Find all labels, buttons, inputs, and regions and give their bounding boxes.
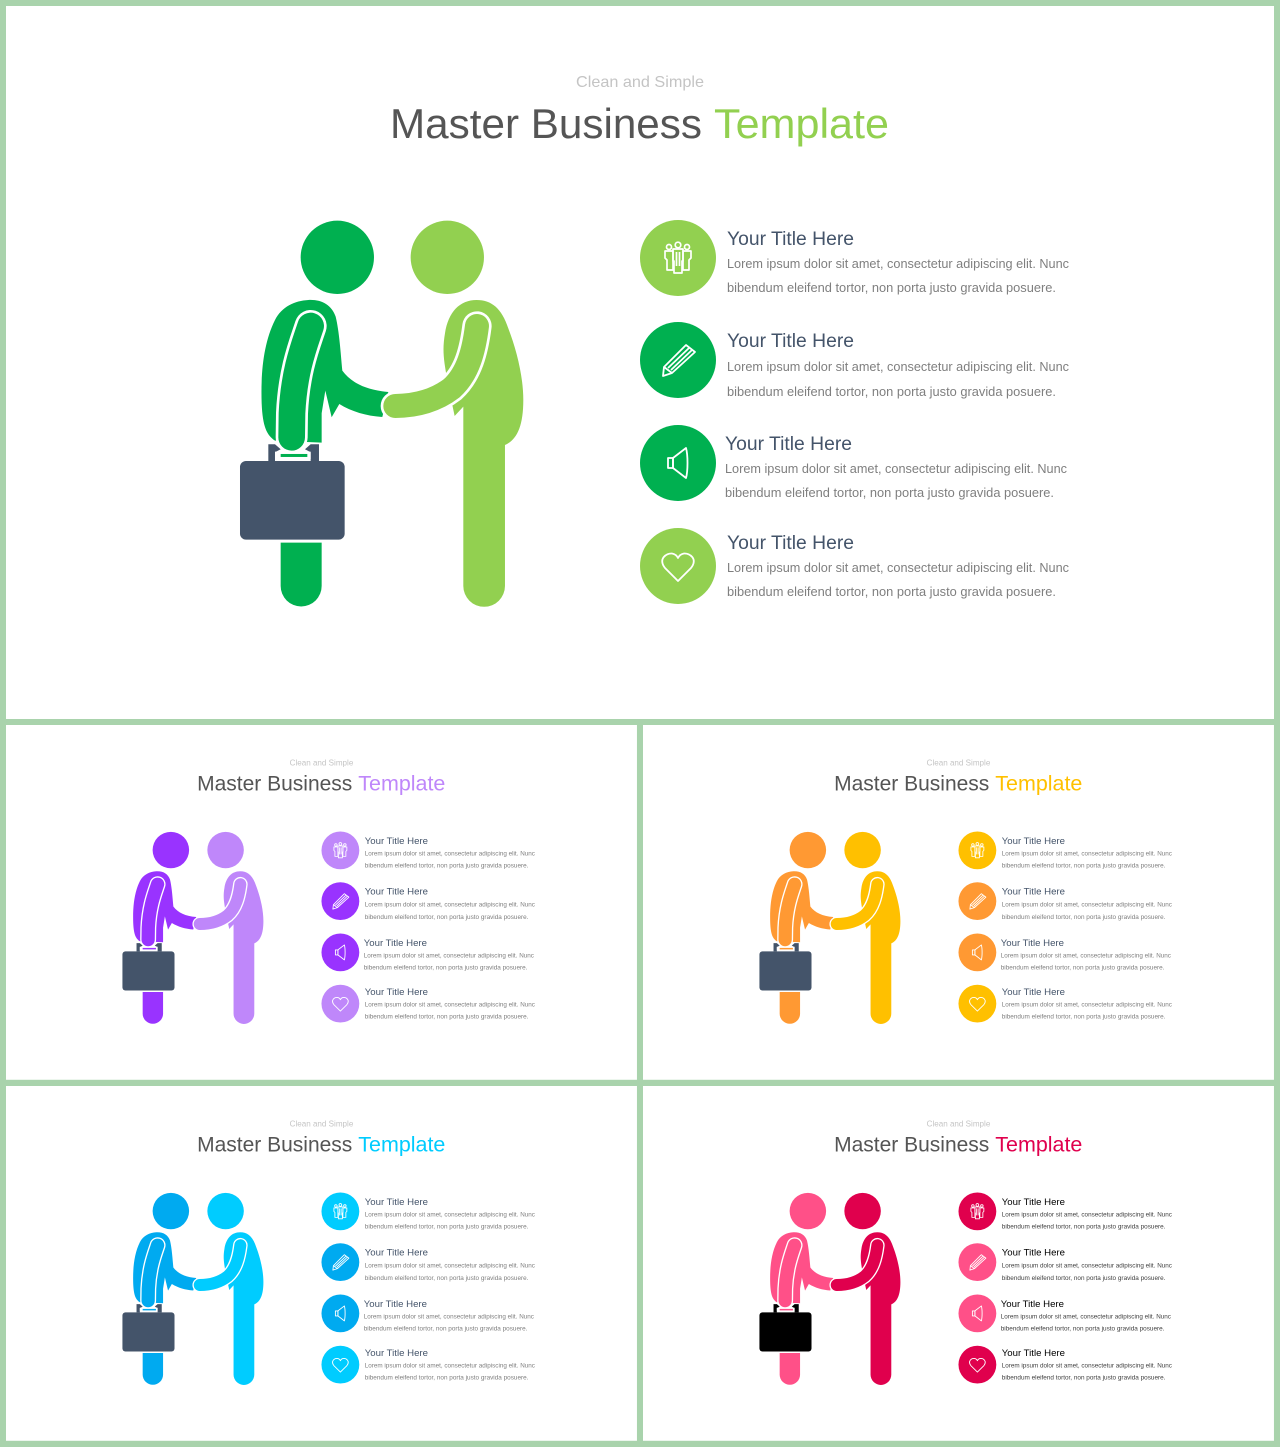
item 4 — [958, 985, 1172, 1023]
item 3: bibendum eleifend tortor, non porta justo gravida posuere. — [364, 1325, 528, 1332]
item 4 — [321, 985, 535, 1023]
panel: blue slide — [6, 1086, 637, 1441]
figure: handshake with briefcase — [122, 832, 263, 1024]
item 2 — [640, 322, 1069, 399]
item 2: Your Title Here — [365, 887, 428, 898]
item 3: Lorem ipsum dolor sit amet, consectetur adipiscing elit. Nunc — [725, 462, 1067, 476]
title: Master Business — [197, 773, 352, 796]
title: Template — [995, 1134, 1082, 1157]
item 2 — [321, 1243, 535, 1282]
eyebrow text: Clean and Simple — [290, 1119, 354, 1128]
item 2: Lorem ipsum dolor sit amet, consectetur adipiscing elit. Nunc — [365, 902, 535, 909]
item 1: Your Title Here — [727, 229, 854, 250]
item 1 — [321, 831, 535, 869]
title: Master Business — [834, 1134, 989, 1157]
item 4: Your Title Here — [1002, 987, 1065, 998]
item 3 — [321, 933, 534, 971]
item 4: Your Title Here — [727, 533, 854, 554]
item 4: Your Title Here — [365, 1348, 428, 1359]
item 1: bibendum eleifend tortor, non porta justo gravida posuere. — [1002, 1223, 1166, 1230]
item 2: bibendum eleifend tortor, non porta justo gravida posuere. — [1002, 914, 1166, 921]
item 3: Your Title Here — [1001, 938, 1064, 949]
item 1: Your Title Here — [1002, 836, 1065, 847]
figure: handshake with briefcase — [240, 221, 523, 607]
item 1: bibendum eleifend tortor, non porta justo gravida posuere. — [365, 862, 529, 869]
item 1: bibendum eleifend tortor, non porta justo gravida posuere. — [365, 1223, 529, 1230]
item 2: Lorem ipsum dolor sit amet, consectetur adipiscing elit. Nunc — [727, 360, 1069, 374]
figure: handshake with briefcase — [759, 832, 900, 1024]
title: Template — [995, 773, 1082, 796]
eyebrow text: Clean and Simple — [927, 1119, 991, 1128]
item 4: bibendum eleifend tortor, non porta justo gravida posuere. — [365, 1014, 529, 1021]
eyebrow text: Clean and Simple — [576, 74, 704, 91]
panel: orange slide — [643, 725, 1274, 1080]
item 4 — [640, 528, 1069, 604]
eyebrow text: Clean and Simple — [927, 758, 991, 767]
item 2: Lorem ipsum dolor sit amet, consectetur adipiscing elit. Nunc — [1002, 902, 1172, 909]
item 1 — [958, 1192, 1172, 1230]
item 4: Lorem ipsum dolor sit amet, consectetur adipiscing elit. Nunc — [727, 561, 1069, 575]
item 3: bibendum eleifend tortor, non porta justo gravida posuere. — [725, 486, 1054, 500]
item 1: Your Title Here — [365, 1197, 428, 1208]
item 3: bibendum eleifend tortor, non porta justo gravida posuere. — [1001, 964, 1165, 971]
item 3 — [958, 933, 1171, 971]
item 4: bibendum eleifend tortor, non porta justo gravida posuere. — [1002, 1014, 1166, 1021]
item 2: Lorem ipsum dolor sit amet, consectetur adipiscing elit. Nunc — [365, 1263, 535, 1270]
item 1: Lorem ipsum dolor sit amet, consectetur adipiscing elit. Nunc — [1002, 1211, 1172, 1218]
item 2: bibendum eleifend tortor, non porta justo gravida posuere. — [365, 1275, 529, 1282]
item 2: Your Title Here — [1002, 887, 1065, 898]
panel: main green slide — [6, 6, 1274, 719]
item 1: bibendum eleifend tortor, non porta justo gravida posuere. — [727, 281, 1056, 295]
item 4: bibendum eleifend tortor, non porta justo gravida posuere. — [365, 1375, 529, 1382]
item 3: Your Title Here — [364, 938, 427, 949]
item 3: Your Title Here — [1001, 1299, 1064, 1310]
panel: purple slide — [6, 725, 637, 1080]
title — [197, 1134, 445, 1157]
title — [834, 1134, 1082, 1157]
eyebrow text: Clean and Simple — [290, 758, 354, 767]
item 1: Lorem ipsum dolor sit amet, consectetur adipiscing elit. Nunc — [365, 850, 535, 857]
figure: handshake with briefcase — [122, 1193, 263, 1385]
item 4: Your Title Here — [365, 987, 428, 998]
item 2: Your Title Here — [1002, 1248, 1065, 1259]
item 1 — [321, 1192, 535, 1230]
item 2: bibendum eleifend tortor, non porta justo gravida posuere. — [365, 914, 529, 921]
item 2 — [958, 1243, 1172, 1282]
title: Master Business — [834, 773, 989, 796]
item 1: bibendum eleifend tortor, non porta justo gravida posuere. — [1002, 862, 1166, 869]
item 1: Lorem ipsum dolor sit amet, consectetur adipiscing elit. Nunc — [727, 257, 1069, 271]
item 2: bibendum eleifend tortor, non porta justo gravida posuere. — [1002, 1275, 1166, 1282]
panel: pink slide — [643, 1086, 1274, 1441]
item 4 — [958, 1346, 1172, 1384]
item 3: Lorem ipsum dolor sit amet, consectetur adipiscing elit. Nunc — [364, 952, 534, 959]
title — [197, 773, 445, 796]
title — [834, 773, 1082, 796]
item 4: bibendum eleifend tortor, non porta justo gravida posuere. — [1002, 1375, 1166, 1382]
item 3: Lorem ipsum dolor sit amet, consectetur adipiscing elit. Nunc — [1001, 1313, 1171, 1320]
item 1 — [958, 831, 1172, 869]
item 3: Lorem ipsum dolor sit amet, consectetur adipiscing elit. Nunc — [364, 1313, 534, 1320]
item 2: Lorem ipsum dolor sit amet, consectetur adipiscing elit. Nunc — [1002, 1263, 1172, 1270]
item 4: Your Title Here — [1002, 1348, 1065, 1359]
item 1: Lorem ipsum dolor sit amet, consectetur adipiscing elit. Nunc — [1002, 850, 1172, 857]
item 3: bibendum eleifend tortor, non porta justo gravida posuere. — [364, 964, 528, 971]
item 3 — [321, 1294, 534, 1332]
item 1: Your Title Here — [1002, 1197, 1065, 1208]
title: Template — [358, 773, 445, 796]
title: Master Business — [197, 1134, 352, 1157]
item 4: Lorem ipsum dolor sit amet, consectetur adipiscing elit. Nunc — [365, 1363, 535, 1370]
item 1: Lorem ipsum dolor sit amet, consectetur adipiscing elit. Nunc — [365, 1211, 535, 1218]
item 3 — [640, 425, 1067, 501]
item 3: Lorem ipsum dolor sit amet, consectetur adipiscing elit. Nunc — [1001, 952, 1171, 959]
item 2: Your Title Here — [365, 1248, 428, 1259]
item 3: bibendum eleifend tortor, non porta justo gravida posuere. — [1001, 1325, 1165, 1332]
item 3: Your Title Here — [364, 1299, 427, 1310]
item 3 — [958, 1294, 1171, 1332]
item 4: Lorem ipsum dolor sit amet, consectetur adipiscing elit. Nunc — [365, 1002, 535, 1009]
title: Master Business — [390, 100, 702, 147]
item 4 — [321, 1346, 535, 1384]
item 4: bibendum eleifend tortor, non porta justo gravida posuere. — [727, 585, 1056, 599]
title: Template — [714, 100, 889, 147]
item 2 — [958, 882, 1172, 921]
item 1: Your Title Here — [365, 836, 428, 847]
item 3: Your Title Here — [725, 434, 852, 455]
item 1 — [640, 220, 1069, 296]
title — [390, 100, 889, 147]
item 4: Lorem ipsum dolor sit amet, consectetur adipiscing elit. Nunc — [1002, 1363, 1172, 1370]
item 2: bibendum eleifend tortor, non porta justo gravida posuere. — [727, 385, 1056, 399]
item 2: Your Title Here — [727, 331, 854, 352]
figure: handshake with briefcase — [759, 1193, 900, 1385]
item 2 — [321, 882, 535, 921]
title: Template — [358, 1134, 445, 1157]
item 4: Lorem ipsum dolor sit amet, consectetur adipiscing elit. Nunc — [1002, 1002, 1172, 1009]
